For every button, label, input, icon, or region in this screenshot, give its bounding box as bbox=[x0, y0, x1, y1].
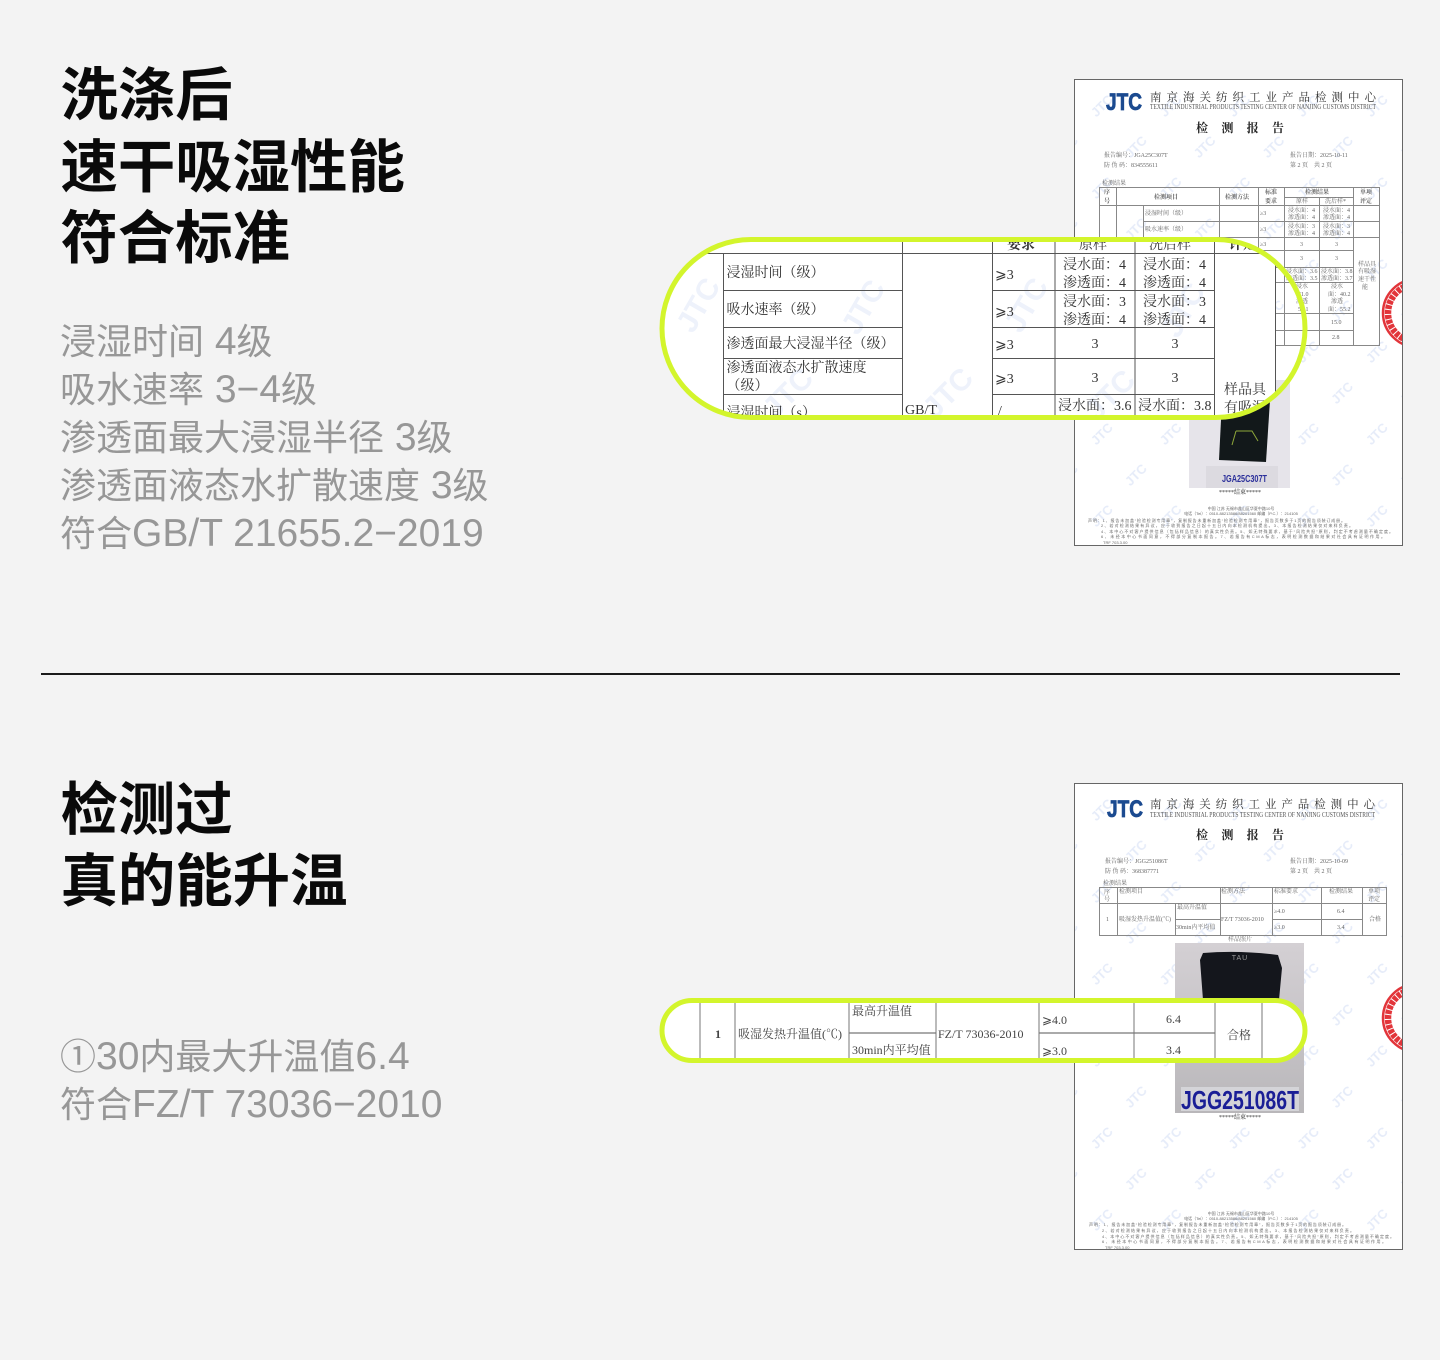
heading: section 2: 检测过 bbox=[60, 778, 233, 842]
small results table: 检测项目 bbox=[1119, 887, 1143, 895]
table values: 3 bbox=[1092, 371, 1098, 386]
small results table: 6.4 bbox=[1337, 909, 1344, 915]
watermarks: JTC bbox=[1155, 277, 1212, 343]
small results table: 原样 bbox=[1296, 197, 1308, 205]
institute name: TEXTILE INDUSTRIAL PRODUCTS TESTING CENTER OF NANJING CUSTOMS DISTRICT bbox=[1150, 103, 1377, 111]
watermarks: JTC bbox=[670, 272, 727, 338]
table labels: 浸湿时间（s） bbox=[726, 405, 816, 421]
table values: 3 bbox=[1092, 337, 1098, 352]
institute name: 南京海关纺织工业产品检测中心 bbox=[1150, 90, 1376, 104]
report document 1 bbox=[1074, 80, 1440, 546]
small results table: 号 bbox=[1104, 197, 1110, 205]
header row: 评定 bbox=[1229, 237, 1257, 253]
small results table: 单项 bbox=[1360, 188, 1373, 196]
text block: section 1 results: 浸湿时间 4级 bbox=[60, 320, 273, 363]
small results table: 面：40.2 bbox=[1328, 290, 1351, 298]
watermarks bbox=[678, 278, 1203, 415]
table grid bbox=[680, 254, 1275, 394]
report meta: 检测结果 bbox=[1103, 879, 1127, 887]
text block: section 1 results: 渗透面最大浸湿半径 3级 bbox=[60, 416, 453, 459]
report meta: 报告编号：JGA25C307T bbox=[1104, 151, 1168, 159]
small results table: 浸水 bbox=[1331, 282, 1343, 290]
report footer: 2、若对检测结果有异议，应于收到报告之日起十五日内向本检测机构提出。3、本报告检测结果仅对来样负责。 bbox=[1101, 522, 1353, 528]
table values: ⩾3.0 bbox=[1042, 1044, 1067, 1058]
report footer: 中国 江苏 无锡市蠡山区华夏中路10号 bbox=[1208, 1210, 1274, 1216]
small results table: 能 bbox=[1362, 283, 1368, 291]
table values: 6.4 bbox=[1166, 1012, 1181, 1026]
table values: 浸水面：3.8 bbox=[1138, 397, 1212, 414]
small results table: 样品照片 bbox=[1228, 935, 1252, 943]
table values: ⩾3 bbox=[995, 372, 1014, 387]
heading: section 1 bbox=[60, 64, 405, 271]
heading: section 1: 速干吸湿性能 bbox=[60, 136, 405, 200]
small results table bbox=[1099, 887, 1386, 943]
sample photo 1 bbox=[1189, 380, 1290, 488]
small results table: 有吸湿 bbox=[1358, 267, 1376, 275]
header row: 原样 bbox=[1079, 236, 1107, 253]
small results table: 吸湿发热升温值(℃) bbox=[1119, 915, 1171, 923]
text block: section 1 results: 吸水速率 3−4级 bbox=[60, 368, 317, 411]
small results table: 单项 bbox=[1368, 887, 1381, 895]
text block: section 2 results: 符合FZ/T 73036−2010 bbox=[60, 1083, 442, 1126]
table grid bbox=[849, 1032, 1215, 1034]
small results table: ≥3 bbox=[1260, 242, 1266, 248]
table values: 3.4 bbox=[1166, 1043, 1181, 1057]
report meta: 第 2 页 共 2 页 bbox=[1290, 161, 1332, 169]
heading: section 2 bbox=[60, 778, 347, 914]
text block: section 1 results: 渗透面液态水扩散速度 3级 bbox=[60, 464, 489, 507]
report footer: TRF 703.3.00 bbox=[1105, 1245, 1130, 1250]
watermarks: JTC bbox=[998, 272, 1055, 338]
small results table: 1 bbox=[1106, 917, 1109, 923]
text block: section 1 results: 符合GB/T 21655.2−2019 bbox=[60, 512, 484, 555]
small results table: 41.0 bbox=[1298, 292, 1308, 298]
report meta: 报告日期：2025-10-11 bbox=[1290, 151, 1348, 159]
table values: 吸湿发热升温值(℃) bbox=[738, 1026, 842, 1041]
institute name bbox=[1150, 797, 1376, 819]
small results table: 检测结果 bbox=[1305, 188, 1329, 196]
table values: 渗透面：4 bbox=[1143, 275, 1206, 291]
small results table: 洗后样* bbox=[1325, 197, 1346, 205]
watermarks: JTC bbox=[757, 362, 820, 425]
table labels: 浸湿时间（级） bbox=[726, 265, 824, 281]
small results table: 3.4 bbox=[1337, 925, 1344, 931]
small results table: 标准要求 bbox=[1274, 887, 1298, 895]
report meta: 检测结果 bbox=[1102, 179, 1126, 187]
report title: 检测报告 bbox=[1196, 120, 1284, 135]
report footer bbox=[1089, 1210, 1394, 1250]
table values: 浸水面：3 bbox=[1143, 293, 1206, 310]
end mark: *****结束***** bbox=[1219, 488, 1261, 496]
small results table: 吸水速率（级） bbox=[1145, 225, 1187, 233]
report footer: 电话（Tel）：0510-88213586/88201560 邮编（P.C.）：214105 bbox=[1184, 1215, 1299, 1221]
small results table: 检测方法 bbox=[1225, 193, 1250, 201]
small results table: ≥3 bbox=[1260, 211, 1266, 217]
table values: ⩾3 bbox=[995, 338, 1014, 353]
small results table: 30min内平均值 bbox=[1176, 923, 1215, 931]
small results table: ≥3.0 bbox=[1274, 925, 1285, 931]
small results table: 3 bbox=[1300, 256, 1303, 262]
table values: 1 bbox=[715, 1027, 721, 1041]
report meta bbox=[1103, 857, 1348, 887]
heading: section 1: 符合标准 bbox=[60, 207, 290, 271]
report footer: 中国 江苏 无锡市蠡山区华夏中路10号 bbox=[1208, 505, 1274, 511]
table values bbox=[715, 1003, 1251, 1058]
heading: section 1: 洗涤后 bbox=[60, 64, 233, 128]
small results table: 最高升温值 bbox=[1177, 903, 1207, 911]
small results table: 检测结果 bbox=[1329, 887, 1353, 895]
table values: 渗透面：4 bbox=[1063, 275, 1126, 291]
callout pill 1: enlarged test table bbox=[662, 235, 1305, 427]
table values: 合格 bbox=[1227, 1027, 1251, 1042]
table values: 渗透面：4 bbox=[1063, 312, 1126, 328]
report footer: 2、若对检测结果有异议，应于收到报告之日起十五日内向本检测机构提出。3、本报告检测结果仅对来样负责。 bbox=[1102, 1227, 1354, 1233]
small results table: FZ/T 73036-2010 bbox=[1221, 917, 1264, 923]
text block: section 2 results: ①30内最大升温值6.4 bbox=[60, 1035, 410, 1078]
small results table: 速干性 bbox=[1358, 275, 1376, 283]
table values: 有吸湿 bbox=[1224, 400, 1266, 416]
small results table: 浸水面：3.6 bbox=[1286, 267, 1318, 275]
report footer: 电话（Tel）：0510-88213586/88201560 邮编（P.C.）：214105 bbox=[1184, 510, 1299, 516]
institute name: TEXTILE INDUSTRIAL PRODUCTS TESTING CENTER OF NANJING CUSTOMS DISTRICT bbox=[1150, 811, 1376, 819]
logo: JTC: JTC bbox=[1107, 796, 1143, 823]
small results table: 样品具 bbox=[1358, 260, 1377, 268]
heading: section 2: 真的能升温 bbox=[60, 850, 347, 914]
small results table: 要求 bbox=[1265, 197, 1277, 205]
small results table: 渗透 bbox=[1331, 297, 1343, 305]
report footer: 声明：1、报告未加盖“检验检测专用章”，复制报告未重新加盖“检验检测专用章”，报告页数多于1页的报告须装订成册。 bbox=[1088, 517, 1345, 523]
report footer: 声明：1、报告未加盖“检验检测专用章”，复制报告未重新加盖“检验检测专用章”，报告页数多于1页的报告须装订成册。 bbox=[1089, 1221, 1346, 1227]
sample photo 2: TAU bbox=[1232, 955, 1248, 962]
small results table: 序 bbox=[1104, 188, 1110, 196]
small results table: 评定 bbox=[1360, 197, 1372, 205]
small results table: 渗透面：3.5 bbox=[1286, 274, 1318, 282]
table labels bbox=[726, 265, 937, 421]
table values: ⩾4.0 bbox=[1042, 1013, 1067, 1027]
table values: 渗透面：4 bbox=[1143, 312, 1206, 328]
pill outline bbox=[662, 1000, 1305, 1060]
divider bbox=[41, 673, 1400, 675]
watermarks: JTC bbox=[1079, 364, 1142, 427]
small results table: 渗透面：4 bbox=[1323, 213, 1350, 221]
table values: / bbox=[998, 404, 1002, 419]
small results table: 序 bbox=[1104, 888, 1110, 896]
table values: 浸水面：3.6 bbox=[1058, 397, 1132, 414]
table values: 30min内平均值 bbox=[852, 1042, 931, 1057]
table values: ⩾3 bbox=[995, 305, 1014, 320]
table values: 3 bbox=[1172, 371, 1178, 386]
small results table: 合格 bbox=[1369, 915, 1381, 923]
table values: 浸水面：3 bbox=[1063, 293, 1126, 310]
small results table: 面：55.2 bbox=[1328, 305, 1351, 313]
report footer: 6、未经本中心书面同意，不得部分复制本报告。7、若报告有CMA标志，表明检测数据和结果对社会具有证明作用。 bbox=[1101, 533, 1385, 539]
end mark: *****结束***** bbox=[1219, 1113, 1261, 1121]
small results table: ≥3 bbox=[1260, 227, 1266, 233]
small results table: 渗透面：4 bbox=[1323, 229, 1350, 237]
table image backing bbox=[662, 239, 1276, 418]
table values: 3 bbox=[1172, 337, 1178, 352]
photo fragment bbox=[1258, 402, 1272, 420]
small results table: 浸水 bbox=[1296, 282, 1308, 290]
callout pill 2: enlarged test table bbox=[662, 1000, 1305, 1061]
header row: 要求 bbox=[1007, 236, 1035, 253]
small results table: 渗透面：3.7 bbox=[1321, 274, 1353, 282]
small results table: 3 bbox=[1335, 256, 1338, 262]
report footer: TRF 703.3.00 bbox=[1103, 540, 1128, 545]
logo: JTC: JTC bbox=[1106, 89, 1142, 116]
small results table: 标准 bbox=[1265, 188, 1277, 196]
report footer: 4、本中心不对客户提供信息（包括样品信息）的真实性负责。5、如无特殊要求，基于“风险共担”原则，判定不考虑测量不确定度。 bbox=[1102, 1233, 1394, 1239]
small results table: 浸水面：3 bbox=[1288, 222, 1315, 230]
small results table: 3 bbox=[1300, 242, 1303, 248]
small results table: 渗透面：4 bbox=[1288, 229, 1315, 237]
table labels: 吸水速率（级） bbox=[726, 301, 824, 318]
watermarks: JTC bbox=[835, 274, 892, 340]
table values: 浸水面：4 bbox=[1143, 256, 1206, 273]
red stamp 1 bbox=[1382, 281, 1402, 345]
table values: FZ/T 73036-2010 bbox=[938, 1027, 1023, 1041]
sample photo 2 bbox=[1175, 943, 1304, 1115]
text block: section 1 results bbox=[60, 320, 489, 555]
small results table: 浸水面：3.8 bbox=[1321, 267, 1353, 275]
report meta: 第 2 页 共 2 页 bbox=[1290, 867, 1332, 875]
report meta: 报告日期：2025-10-09 bbox=[1290, 857, 1348, 865]
table values: 浸水面：4 bbox=[1063, 256, 1126, 273]
table values bbox=[995, 256, 1267, 419]
small results table: 渗透 bbox=[1296, 297, 1308, 305]
small results table: ≥4.0 bbox=[1274, 909, 1285, 915]
table values: 最高升温值 bbox=[852, 1003, 912, 1018]
small results table: 渗透面：4 bbox=[1288, 213, 1315, 221]
small results table: 号 bbox=[1104, 895, 1110, 903]
report footer: 6、未经本中心书面同意，不得部分复制本报告。7、若报告有CMA标志，表明检测数据和结果对社会具有证明作用。 bbox=[1102, 1238, 1386, 1244]
report document 2 bbox=[1074, 784, 1440, 1250]
report meta: 防 伪 码：368387771 bbox=[1105, 867, 1159, 875]
report meta: 防 伪 码：834555611 bbox=[1104, 161, 1158, 169]
small results table: 2.8 bbox=[1332, 335, 1340, 341]
table labels: GB/T bbox=[905, 403, 937, 418]
institute name bbox=[1150, 90, 1377, 111]
small results table: 3 bbox=[1335, 242, 1338, 248]
small results table: 检测方法 bbox=[1221, 887, 1246, 895]
table values: ⩾3 bbox=[995, 268, 1014, 283]
report meta: 报告编号：JGG251086T bbox=[1105, 857, 1168, 865]
table labels: （级） bbox=[726, 378, 768, 394]
small results table bbox=[1099, 187, 1380, 346]
table values: 样品具 bbox=[1224, 381, 1267, 398]
header row bbox=[1008, 242, 1252, 250]
report footer bbox=[1088, 505, 1393, 545]
small results table: 浸水面：4 bbox=[1323, 206, 1350, 214]
sample photo 1: JGA25C307T bbox=[1222, 474, 1267, 485]
report title: 检测报告 bbox=[1196, 827, 1284, 842]
header row: 洗后样 bbox=[1149, 236, 1191, 253]
small results table: 检测项目 bbox=[1154, 193, 1178, 201]
pill outline bbox=[662, 240, 1305, 418]
small results table: 15.0 bbox=[1331, 320, 1342, 326]
table labels: 渗透面液态水扩散速度 bbox=[726, 359, 866, 376]
small results table: 浸水面：3 bbox=[1323, 222, 1350, 230]
report meta bbox=[1102, 151, 1348, 187]
text block: section 2 results bbox=[60, 1035, 442, 1126]
red stamp 2 bbox=[1382, 986, 1402, 1050]
small results table: 评定 bbox=[1368, 895, 1380, 903]
small results table: 浸湿时间（级） bbox=[1145, 209, 1187, 217]
institute name: 南京海关纺织工业产品检测中心 bbox=[1150, 797, 1376, 811]
small results table: 55.1 bbox=[1298, 307, 1308, 313]
report footer: 4、本中心不对客户提供信息（包括样品信息）的真实性负责。5、如无特殊要求，基于“风险共担”原则，判定不考虑测量不确定度。 bbox=[1101, 528, 1393, 534]
sample photo 2: JGG251086T bbox=[1181, 1085, 1299, 1115]
small results table: 浸水面：4 bbox=[1288, 206, 1315, 214]
watermarks: JTC bbox=[917, 362, 980, 425]
table labels: 渗透面最大浸湿半径（级） bbox=[726, 335, 894, 352]
